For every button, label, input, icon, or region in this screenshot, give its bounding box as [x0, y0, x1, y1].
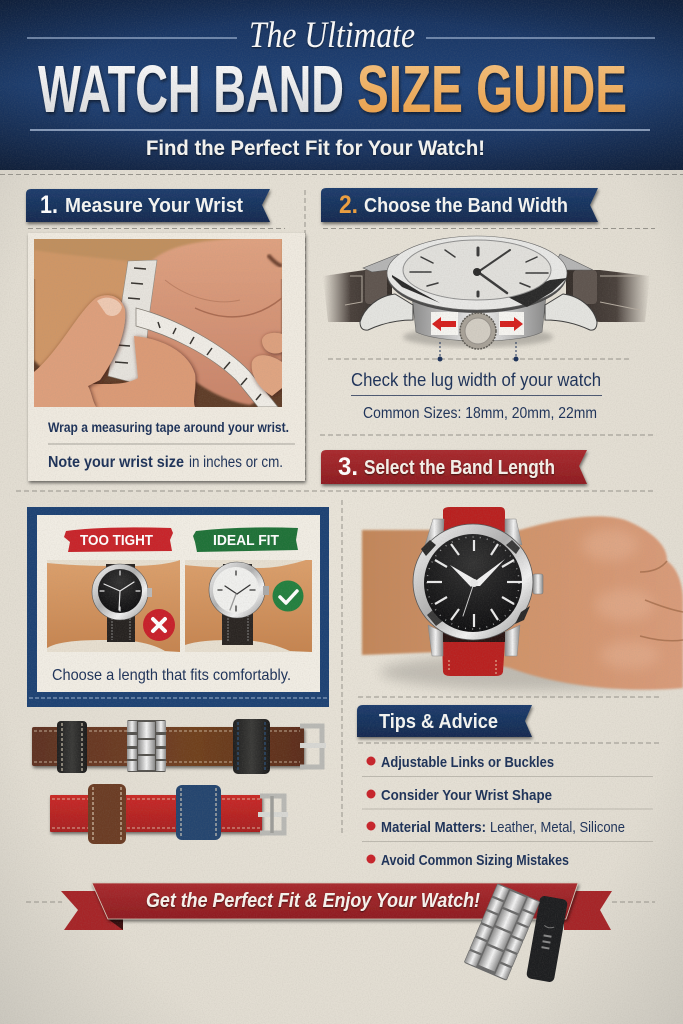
tip 3: Leather, Metal, Silicone [490, 819, 625, 836]
dark blue-stitched loop [233, 719, 270, 774]
photo: ideal fit watch [185, 558, 312, 652]
tip 4: Avoid Common Sizing Mistakes [381, 852, 569, 869]
lugs upper [363, 254, 406, 272]
heading: step 1: 1. [40, 191, 58, 219]
heading: tips: Tips & Advice [379, 711, 498, 733]
photo: measuring tape on wrist [34, 236, 282, 407]
caption: note size: Note your wrist size [48, 454, 184, 471]
icon: red cross [143, 609, 175, 641]
red strap [443, 507, 505, 532]
panel: fit comparison [27, 507, 329, 707]
text: check lug width: Check the lug width of your watch [351, 370, 601, 390]
heading: step 1 [26, 189, 270, 222]
dial [424, 534, 522, 632]
heading: step 3: 3. [338, 453, 358, 481]
header band [0, 0, 683, 170]
case side [412, 296, 546, 341]
hands [450, 559, 505, 616]
blue loop [176, 785, 221, 840]
caption: choose length: Choose a length that fits comfortably. [52, 667, 291, 684]
dark loop [57, 721, 87, 773]
lug width arrows [431, 312, 524, 335]
illustration: black silicone band [526, 895, 568, 983]
icon: green check [272, 580, 304, 612]
footer ribbon [61, 883, 612, 930]
arm and hand [362, 516, 683, 690]
illustration: brown strap [32, 719, 326, 774]
strap left [323, 270, 392, 322]
strap right [566, 270, 650, 322]
label: ideal fit: IDEAL FIT [213, 532, 279, 549]
lugs [425, 519, 522, 656]
heading: step 2: 2. [339, 191, 358, 219]
tip 3 [366, 819, 625, 836]
hour markers [427, 540, 522, 627]
brown loop [88, 784, 126, 844]
text: common sizes: Common Sizes: 18mm, 20mm, 22mm [363, 405, 597, 422]
buckle [258, 796, 288, 833]
bezel [413, 524, 533, 640]
illustration: red strap [50, 784, 288, 844]
label: too tight [64, 527, 173, 552]
heading: step 2 [321, 188, 598, 222]
panel: measure wrist card [28, 233, 305, 481]
lugs lower [360, 294, 413, 330]
illustration: steel bracelet [464, 883, 540, 981]
tips list [362, 754, 653, 869]
illustration: watch side view [323, 236, 650, 362]
measure markers [440, 342, 516, 358]
caption: wrap: Wrap a measuring tape around your wrist. [48, 419, 289, 435]
caption: note size [48, 454, 283, 471]
title script: The Ultimate [249, 15, 415, 56]
bezel [387, 237, 567, 313]
label: ideal fit [193, 527, 298, 552]
subtitle: Find the Perfect Fit for Your Watch! [146, 137, 485, 160]
knuckle highlights [582, 529, 660, 669]
photo: too tight watch [47, 560, 180, 652]
tip 2: Consider Your Wrist Shape [381, 787, 552, 804]
tip 1: Adjustable Links or Buckles [381, 754, 554, 771]
heading: step 3: Select the Band Length [364, 457, 555, 479]
main title: WATCH BAND [38, 52, 344, 127]
section dividers [0, 174, 683, 902]
heading: step 3 [321, 450, 587, 484]
heading: step 1: Measure Your Wrist [65, 194, 243, 217]
crown [533, 574, 543, 594]
footer text: Get the Perfect Fit & Enjoy Your Watch! [146, 890, 480, 912]
label: too tight: TOO TIGHT [80, 532, 153, 549]
tip 3: Material Matters: [381, 819, 486, 836]
heading: tips [357, 705, 532, 737]
illustration: large watch on wrist [362, 507, 683, 690]
heading: step 2: Choose the Band Width [364, 194, 568, 217]
caption: note size: in inches or cm. [189, 454, 283, 471]
crown [460, 313, 496, 349]
dial ticks and hands [410, 248, 548, 296]
metal links [127, 720, 166, 772]
buckle [300, 726, 326, 767]
